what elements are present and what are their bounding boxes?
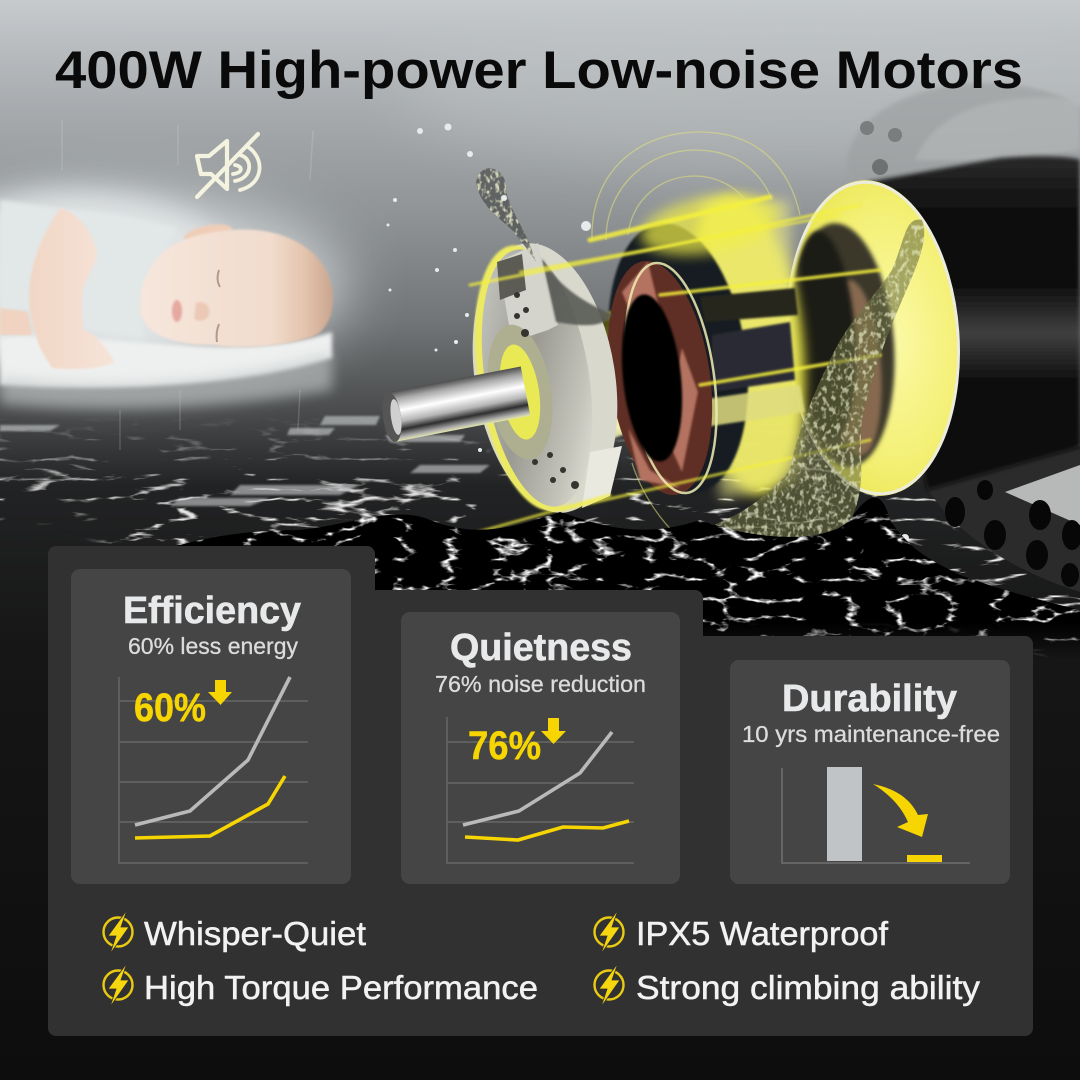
splash behind plate <box>542 258 612 325</box>
copper winding <box>594 254 726 502</box>
card: durability <box>730 660 1010 884</box>
perforated hub bottom <box>925 445 1080 592</box>
value: 60%: 60% <box>134 686 206 730</box>
motor body <box>868 156 1080 490</box>
barrel <box>551 304 646 458</box>
feature: waterproof <box>594 910 889 954</box>
line chart: quietness <box>447 717 634 863</box>
arrow: curved down <box>873 784 928 837</box>
nose <box>194 302 209 321</box>
bright plate wedge <box>582 446 622 508</box>
card: quietness <box>401 612 680 884</box>
water splash <box>0 124 1080 658</box>
feature: waterproof: IPX5 Waterproof <box>636 915 889 952</box>
heading: durability: Durability <box>782 678 957 720</box>
light haze top right <box>400 10 1080 170</box>
subheading: durability: 10 yrs maintenance-free <box>742 721 1000 747</box>
feature list <box>104 910 981 1007</box>
feature: whisper-quiet <box>104 910 366 954</box>
heading: quietness: Quietness <box>450 627 632 669</box>
bar chart: durability <box>782 767 970 863</box>
shaft <box>380 367 530 443</box>
yellow haze over rotor top <box>636 185 784 265</box>
rotor dark ring <box>592 214 764 502</box>
feature: high torque: High Torque Performance <box>144 969 538 1006</box>
panel background <box>48 546 1033 1036</box>
lips <box>172 300 182 322</box>
thin orbit arcs <box>592 132 800 573</box>
icon: muted speaker <box>197 134 260 197</box>
feature: climbing <box>594 963 981 1007</box>
subheading: efficiency: 60% less energy <box>128 633 298 659</box>
feature: whisper-quiet: Whisper-Quiet <box>144 915 366 952</box>
card: efficiency <box>71 569 351 884</box>
front plate <box>455 233 635 523</box>
motor <box>380 83 1080 592</box>
rotor core <box>614 291 690 465</box>
heading: efficiency: Efficiency <box>123 590 301 632</box>
eye upper <box>218 270 220 287</box>
yellow rotor glow <box>672 190 818 500</box>
value: 76%: 76% <box>468 724 541 768</box>
ear <box>183 224 232 243</box>
line chart: efficiency <box>119 677 308 863</box>
feature: climbing: Strong climbing ability <box>636 969 981 1006</box>
eye lower <box>217 324 219 342</box>
arrow: down <box>541 718 566 744</box>
title: 400W High-power Low-noise Motors <box>55 41 1023 100</box>
panel: specs <box>48 546 1033 1036</box>
wave front <box>177 498 1080 656</box>
rain streaks <box>62 120 313 450</box>
pillow <box>0 332 332 388</box>
droplets <box>386 124 909 583</box>
yellow energy streaks <box>450 197 880 540</box>
baby sleeping <box>0 190 345 409</box>
splash: left <box>476 168 536 262</box>
leg <box>0 308 32 335</box>
rear yellow plate <box>776 174 970 502</box>
arm <box>29 208 115 369</box>
rotor spokes <box>700 288 798 322</box>
head <box>140 230 333 347</box>
rear hub top <box>847 83 1080 247</box>
cloud glow <box>0 200 345 370</box>
water surface <box>0 415 1080 655</box>
shirt <box>0 200 178 338</box>
subheading: quietness: 76% noise reduction <box>435 671 646 697</box>
arrow: down <box>208 680 232 705</box>
splash: right <box>714 220 924 537</box>
